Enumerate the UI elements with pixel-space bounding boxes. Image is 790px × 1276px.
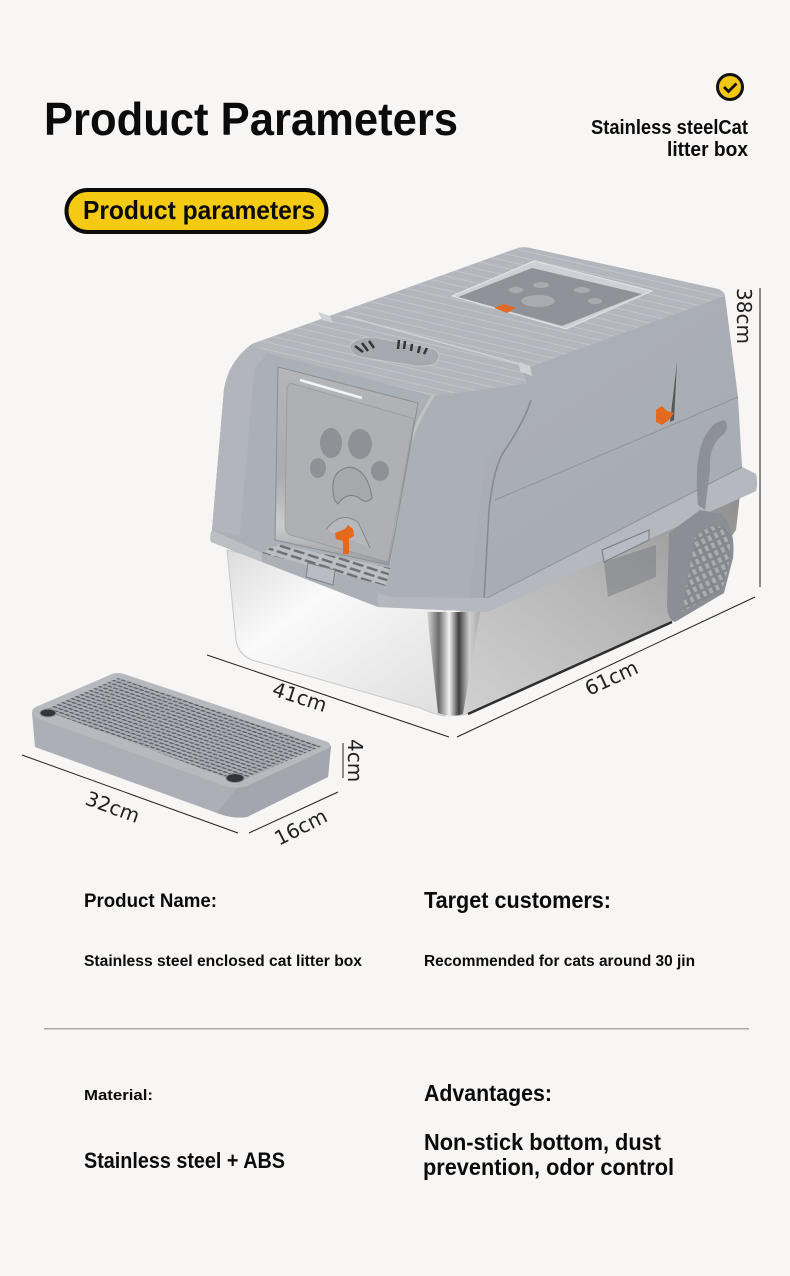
top window (452, 261, 652, 329)
top hinge tabs (318, 312, 532, 376)
side clip (602, 530, 649, 562)
lid body (210, 247, 757, 612)
dimension: length 61cm (457, 597, 755, 737)
spec: target customers: Target customers: (424, 887, 611, 913)
dimension: length 61cm: 61cm (581, 655, 642, 701)
spec: advantages: prevention, odor control (423, 1154, 674, 1180)
dimension: width 41cm: 41cm (269, 677, 330, 717)
spec: material: Stainless steel + ABS (84, 1148, 285, 1173)
orange door latch (335, 525, 354, 554)
dimension: tray width 16cm: 16cm (270, 804, 331, 850)
dimension: tray length 32cm (22, 755, 238, 833)
title: Product Parameters (44, 93, 458, 145)
dimension: tray height 4cm: 4cm (343, 739, 367, 782)
spec: product name (84, 891, 362, 970)
shadow under side tab (604, 545, 656, 597)
dimension: height 38cm: 38cm (732, 288, 756, 344)
rim (378, 467, 757, 612)
stainless tub front (227, 550, 445, 716)
product type label: Stainless steelCat (591, 117, 748, 139)
dimension: tray length 32cm: 32cm (82, 786, 143, 828)
arch highlight (212, 344, 267, 535)
spec: advantages (423, 1080, 674, 1180)
section pill: product parameters: Product parameters (83, 195, 315, 225)
steel corner reflection (427, 612, 480, 716)
spec: product name: Product Name: (84, 891, 217, 912)
section pill: product parameters (66, 190, 326, 232)
top lid seam (345, 316, 520, 364)
product type label (591, 117, 748, 161)
spec: advantages: Non-stick bottom, dust (424, 1129, 661, 1155)
stainless tub side (455, 495, 740, 716)
spec: product name: Stainless steel enclosed cat litter box (84, 953, 362, 970)
door glass (275, 367, 418, 565)
product illustration: enclosed litter box (210, 247, 757, 716)
lid top surface (252, 247, 725, 396)
spec: target customers (424, 887, 695, 970)
accessory: drip tray (32, 673, 331, 818)
vent (350, 337, 439, 366)
spec: material (84, 1087, 285, 1173)
side fold and orange knob (656, 362, 677, 425)
icon: yellow check badge (718, 74, 742, 100)
dimension: width 41cm (207, 655, 449, 737)
scoop (667, 420, 734, 622)
front arch (210, 344, 531, 607)
spec: advantages: Advantages: (424, 1080, 552, 1106)
front tray (262, 544, 390, 586)
paw print (320, 428, 342, 458)
spec: material: Material: (84, 1087, 153, 1104)
spec: target customers: Recommended for cats around 30 jin (424, 953, 695, 970)
product type label: litter box (667, 139, 748, 161)
dimension: tray width 16cm (249, 792, 338, 850)
